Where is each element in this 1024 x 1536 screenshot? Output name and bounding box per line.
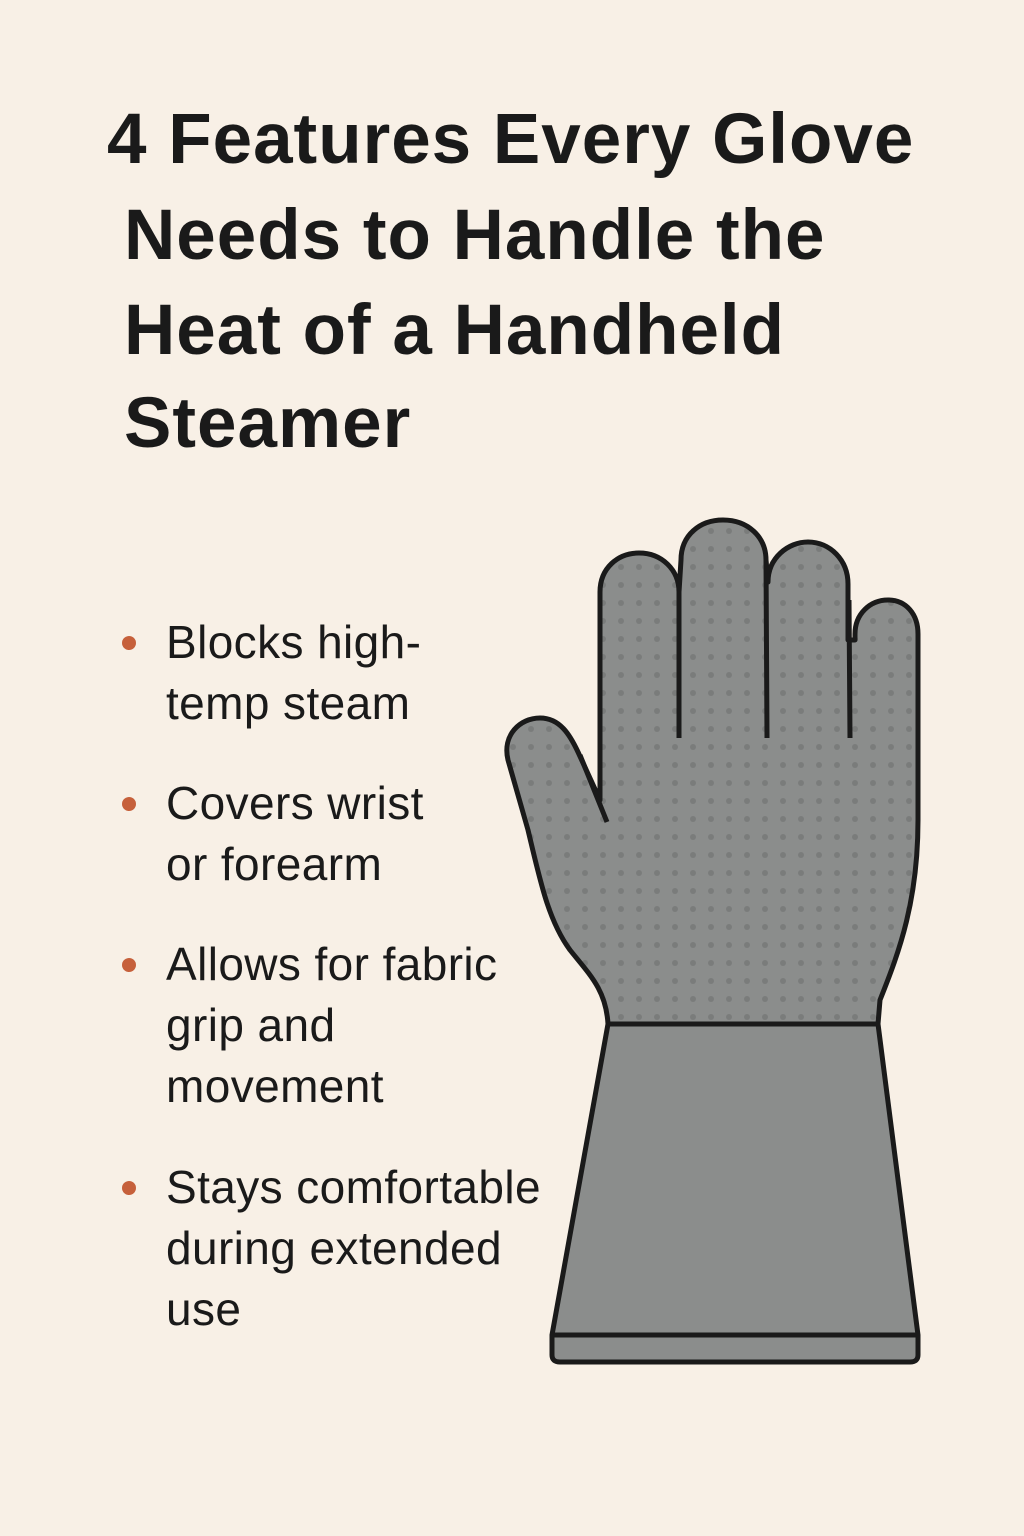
bullet 4: use [166, 1283, 241, 1335]
bullet 2: or forearm [166, 838, 382, 890]
bullet 2 [122, 777, 424, 890]
bullet 4: Stays comfortable [166, 1161, 541, 1213]
bullet 2: Covers wrist [166, 777, 424, 829]
bullet 3: movement [166, 1060, 384, 1112]
bullet 3 [122, 938, 497, 1112]
bullet 3: grip and [166, 999, 335, 1051]
bullet 3: Allows for fabric [166, 938, 497, 990]
title: Heat of a Handheld [124, 291, 785, 370]
title: Steamer [124, 384, 411, 463]
title [107, 100, 914, 463]
bullet 1: temp steam [166, 677, 410, 729]
bullet 4 [122, 1161, 541, 1335]
title: 4 Features Every Glove [107, 100, 914, 179]
bullet 4: during extended [166, 1222, 502, 1274]
bullet 1 [122, 616, 421, 729]
bullet 1: Blocks high- [166, 616, 421, 668]
title: Needs to Handle the [124, 196, 826, 275]
